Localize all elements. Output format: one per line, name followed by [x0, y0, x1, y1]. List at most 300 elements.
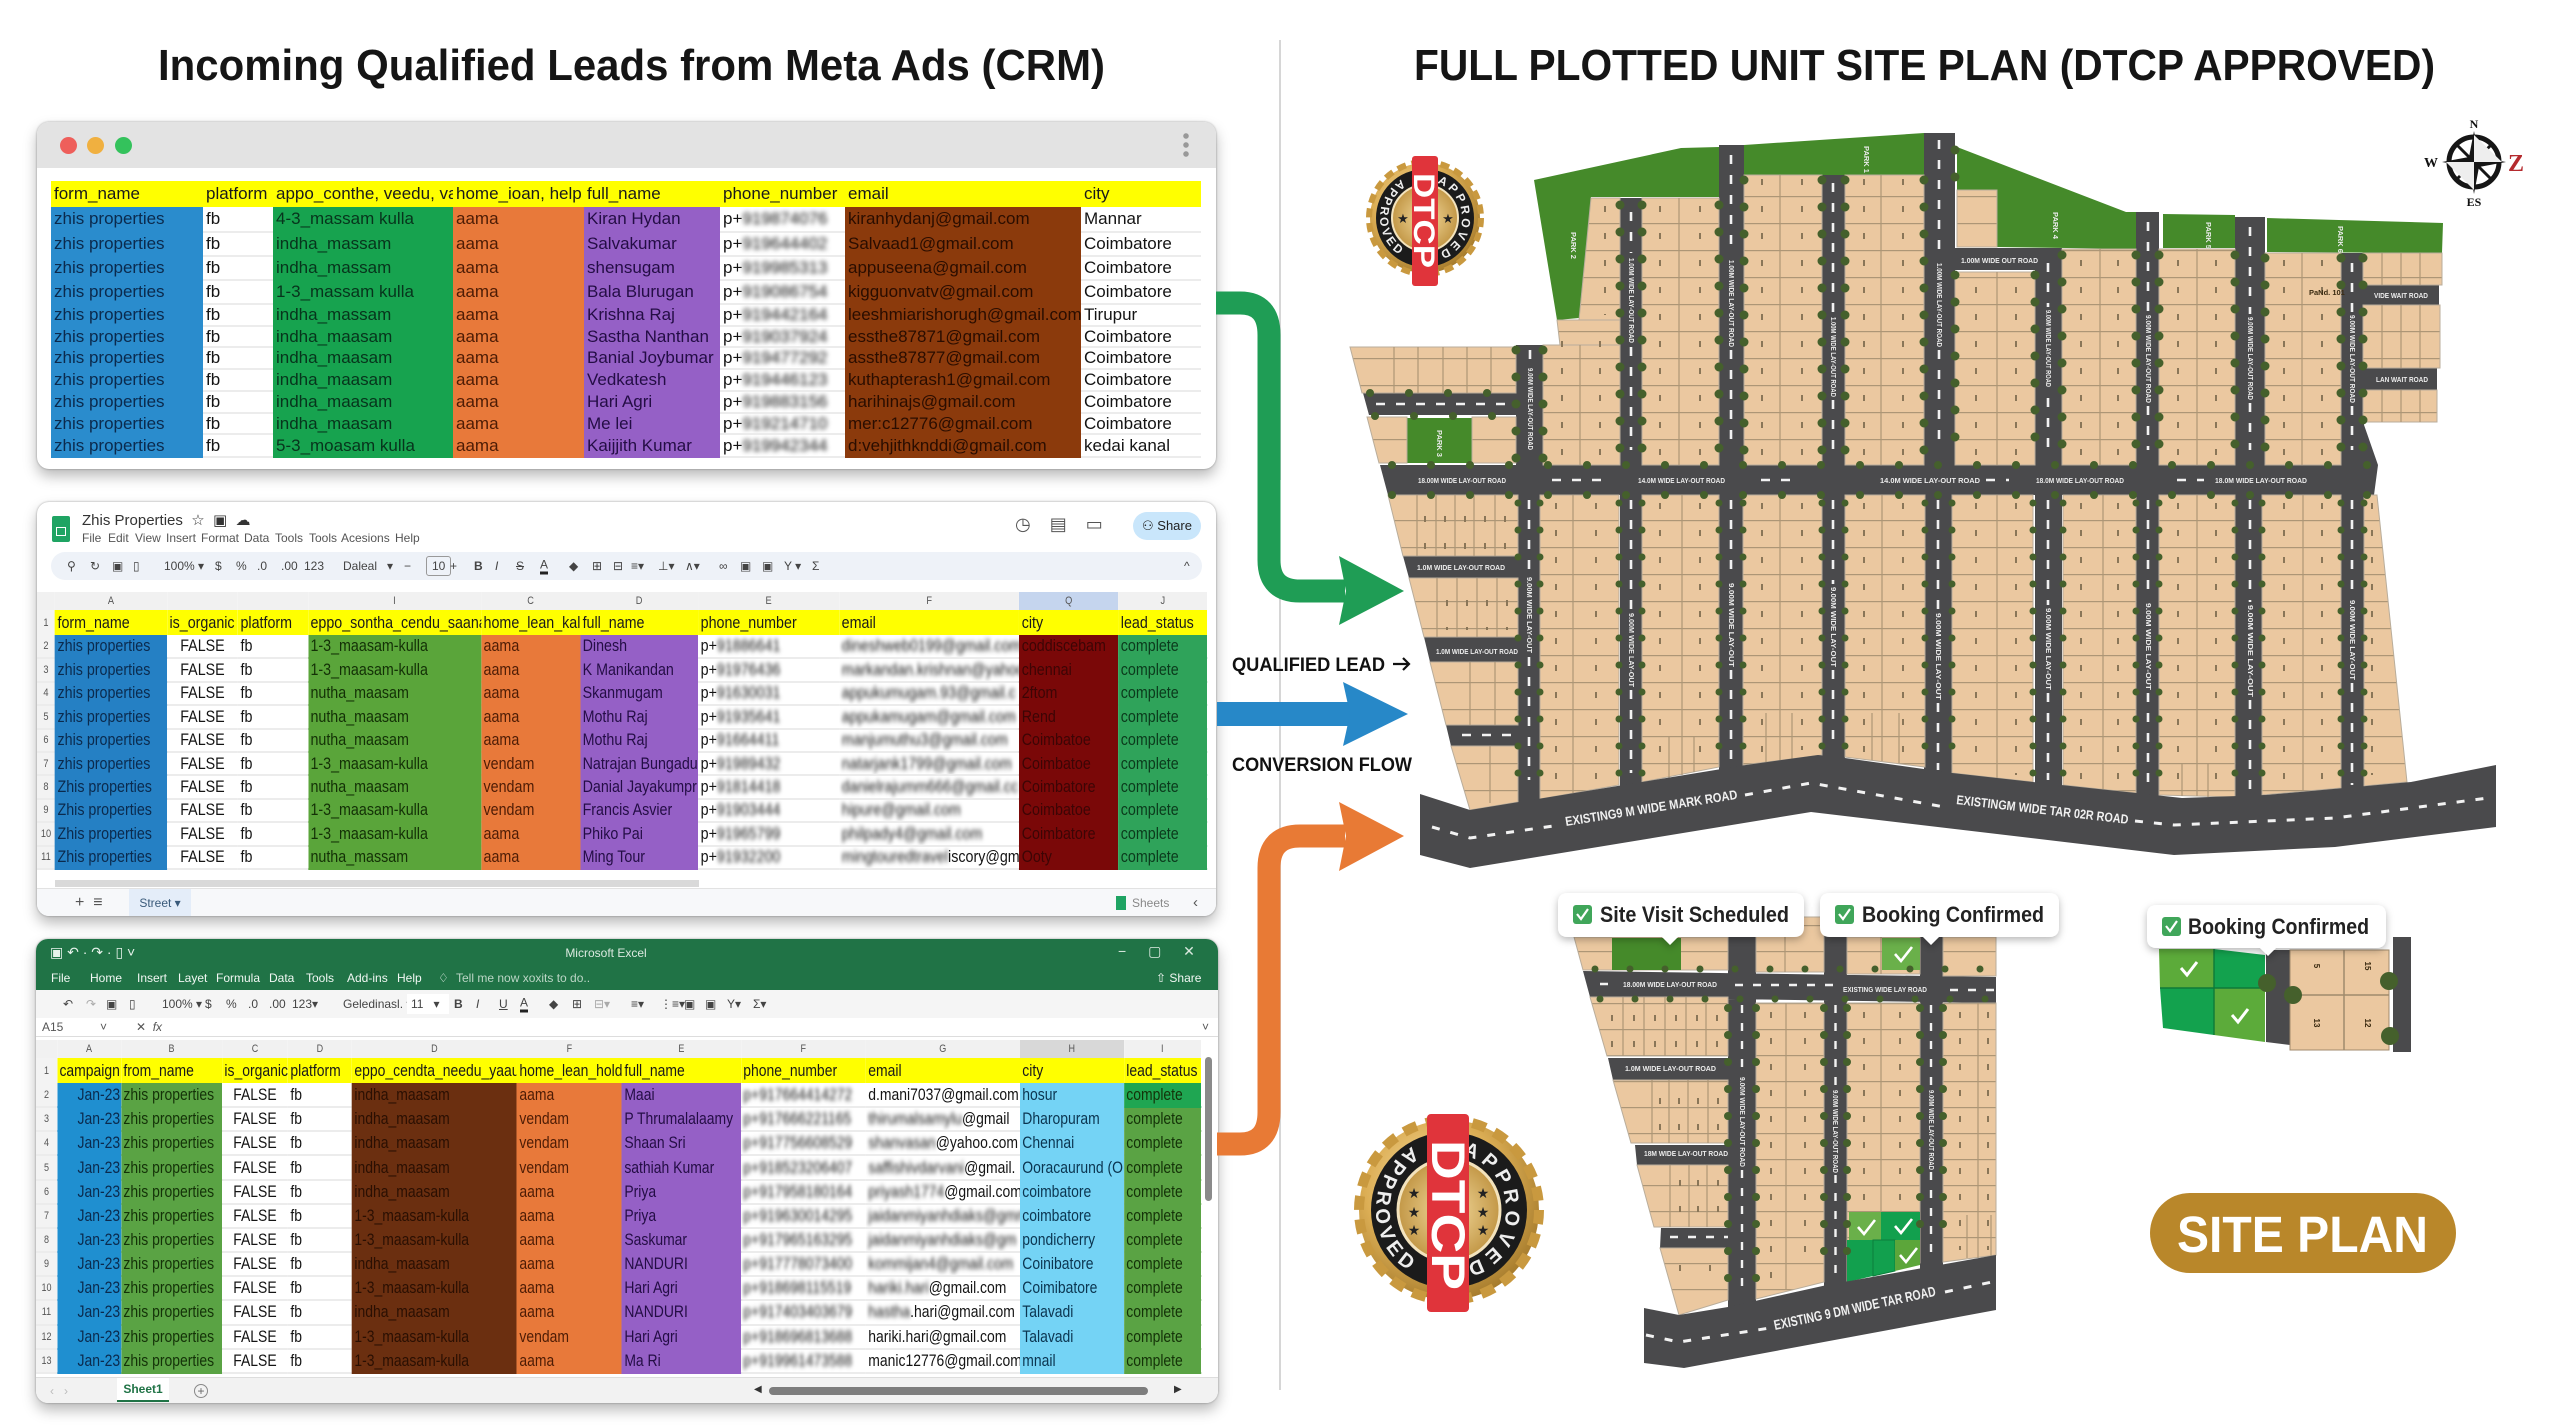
table: CRM leads: 4-3_massam kulla — [276, 209, 414, 228]
table: CRM leads: p+ — [723, 258, 742, 277]
table: Google Sheets leads: K Manikandan — [583, 660, 674, 679]
table: Google Sheets leads: Francis Asvier — [583, 800, 672, 819]
table: CRM leads: Coimbatore — [1084, 234, 1172, 253]
table: Google Sheets leads: FALSE — [180, 707, 225, 726]
table: Excel leads: p+917664414272 — [743, 1085, 852, 1104]
excel title bar — [36, 939, 1218, 990]
excel toolbar: B — [454, 997, 463, 1011]
site plan: booked plot detail — [2159, 937, 2411, 1052]
table: Excel leads: kommijan4@gmail.com — [868, 1254, 1013, 1273]
main road labels: 18.0M WIDE LAY-OUT ROAD — [2036, 476, 2124, 485]
table: CRM leads: Bala Blurugan — [587, 282, 694, 301]
table: Google Sheets leads: Q — [1065, 595, 1072, 607]
table: CRM leads: phone_number — [723, 184, 837, 203]
table: Excel leads: E — [678, 1043, 684, 1055]
table: Google Sheets leads: aama — [484, 824, 519, 843]
table: Excel leads: Jan-23 — [77, 1182, 120, 1201]
sheets toolbar: ⊞ — [592, 559, 602, 573]
excel toolbar: ≡▾ — [631, 997, 644, 1011]
table: Google Sheets leads: zhis properties — [57, 730, 150, 749]
table: Excel leads: FALSE — [233, 1158, 277, 1177]
table: Google Sheets leads: C — [527, 595, 534, 607]
table: Excel leads: p+919961473588 — [743, 1351, 852, 1370]
excel toolbar: ◆ — [549, 997, 558, 1011]
table: Google Sheets leads: 3 — [43, 664, 49, 676]
table: Google Sheets leads: complete — [1121, 847, 1179, 866]
table: Excel leads: indha_maasam — [354, 1158, 450, 1177]
table: Excel leads: @yahoo.com — [936, 1133, 1018, 1152]
table: Excel leads: Ma Ri — [624, 1351, 661, 1370]
main road labels: 1.00M WIDE LAY-OUT ROAD — [1829, 317, 1838, 397]
main road labels: 9.00M WIDE LAY-OUT ROAD — [1526, 368, 1535, 450]
table: Excel leads: FALSE — [233, 1278, 277, 1297]
table: Excel leads: 8 — [44, 1234, 49, 1246]
table: Google Sheets leads: FALSE — [180, 660, 225, 679]
table: Excel leads: hosur — [1022, 1085, 1057, 1104]
table: Excel leads: lead_status — [1126, 1060, 1198, 1080]
table: Excel leads: p+917778073400 — [743, 1254, 852, 1273]
table: Google Sheets leads: danielrajumm666@gmail.cc — [842, 777, 1018, 796]
arrow: orange lead flow — [1217, 802, 1404, 1144]
table: Google Sheets leads: full_name — [583, 612, 645, 632]
arrow: green lead flow — [1216, 303, 1404, 625]
table: CRM leads: p+ — [723, 305, 742, 324]
table: Google Sheets leads: 1-3_maasam-kulla — [310, 660, 428, 679]
table: Excel leads: F — [567, 1043, 572, 1055]
table: Excel leads: Jan-23 — [77, 1327, 120, 1346]
excel toolbar: 123▾ — [292, 997, 318, 1011]
table: Google Sheets leads: fb — [240, 636, 252, 655]
table: Excel leads: B — [168, 1043, 174, 1055]
table: CRM leads: aama — [456, 436, 499, 454]
table: Excel leads: p+919630014295 — [743, 1206, 852, 1225]
trees — [1516, 150, 2363, 462]
table: Excel leads: FALSE — [233, 1327, 277, 1346]
table: Google Sheets leads: Coimbatoe — [1022, 754, 1091, 773]
document title: Zhis Properties ☆ ▣ ☁ — [82, 512, 250, 529]
main road labels: 1.00M WIDE LAY-OUT ROAD — [1727, 260, 1736, 347]
table: Google Sheets leads: 4 — [43, 687, 49, 699]
table: Google Sheets leads: chennai — [1022, 660, 1072, 679]
badge: large DTCP seal — [1354, 1114, 1544, 1312]
table: Google Sheets leads: 11 — [41, 851, 51, 863]
table: Google Sheets leads: F — [926, 595, 932, 607]
table: Excel leads: p+918696813688 — [743, 1327, 852, 1346]
table: CRM leads: Sastha Nanthan — [587, 326, 709, 346]
table: Excel leads: zhis properties — [123, 1158, 214, 1177]
main road labels: 14.0M WIDE LAY-OUT ROAD — [1638, 476, 1725, 485]
badge: small DTCP seal: ★ — [1397, 211, 1409, 226]
table: Google Sheets leads: 91976436 — [717, 660, 780, 679]
table: Excel leads: phone_number — [743, 1060, 837, 1080]
quick access icons: ▣ ↶ · ↷ · ▯ ˅ — [50, 944, 135, 960]
sheet tab bar: Sheet1 — [123, 1382, 163, 1396]
table: CRM leads: kigguonvatv@gmail.com — [848, 282, 1033, 301]
table: Google Sheets leads: complete — [1121, 800, 1179, 819]
table: Google Sheets leads: is_organic — [169, 612, 235, 632]
main road labels: 14.0M WIDE LAY-OUT ROAD — [1880, 476, 1981, 485]
table: Google Sheets leads: 91664411 — [717, 730, 779, 749]
road centre dashes — [1376, 140, 2352, 790]
table: CRM leads — [51, 181, 1201, 458]
table: CRM leads: aama — [456, 326, 499, 346]
table: Google Sheets leads: zhis properties — [57, 636, 150, 655]
excel toolbar: I — [476, 997, 479, 1011]
table: Excel leads: Maai — [624, 1085, 655, 1104]
table: CRM leads: platform — [206, 184, 267, 203]
table: Excel leads: zhis properties — [123, 1278, 214, 1297]
table: Excel leads: D — [431, 1043, 438, 1055]
zoomed road labels: 1.0M WIDE LAY-OUT ROAD — [1625, 1064, 1717, 1073]
vertical scrollbar — [1205, 1057, 1212, 1201]
table: Excel leads: email — [868, 1060, 902, 1080]
sheets toolbar: $ — [215, 559, 222, 573]
existing bottom road: EXISTING9 M WIDE MARK ROAD — [1564, 787, 1738, 829]
excel toolbar: ▯ — [129, 997, 136, 1011]
share button — [1133, 512, 1201, 540]
compass: W — [2424, 156, 2438, 171]
table: Google Sheets leads: D — [636, 595, 642, 607]
table: Google Sheets leads: 5 — [43, 711, 49, 723]
table: CRM leads: fb — [206, 436, 220, 454]
table: Excel leads: Jan-23 — [77, 1133, 120, 1152]
sheets toolbar: .0 — [257, 559, 267, 573]
excel toolbar: ▣ — [106, 997, 117, 1011]
table: CRM leads: Banial Joybumar — [587, 348, 714, 367]
table: Excel leads: Priya — [624, 1206, 656, 1225]
sheets menu: Tools — [309, 531, 337, 545]
table: CRM leads: kuthapterash1@gmail.com — [848, 370, 1050, 389]
table: Google Sheets leads: vendam — [484, 777, 534, 796]
table: CRM leads: indha_maasam — [276, 326, 392, 346]
sheets toolbar: ^ — [1184, 559, 1190, 573]
table: Google Sheets leads: complete — [1121, 754, 1179, 773]
plots — [1350, 175, 2442, 810]
main road labels: PaNd. 101 — [2309, 288, 2345, 297]
table: Excel leads: 13 — [41, 1355, 52, 1367]
table: Excel leads: complete — [1126, 1302, 1183, 1321]
table: Google Sheets leads: 2 — [43, 640, 49, 652]
sheets toolbar: Y ▾ — [784, 559, 801, 573]
table: Excel leads: indha_maasam — [354, 1302, 450, 1321]
table: Excel leads: indha_maasam — [354, 1182, 450, 1201]
table: CRM leads: fb — [206, 305, 220, 324]
table: Google Sheets leads: natarjank1799@gmail.com — [842, 754, 1012, 773]
table: Excel leads: Saskumar — [624, 1230, 687, 1249]
site plan: booked plot detail: 5 — [2312, 964, 2321, 969]
badge: large DTCP seal: DTCP — [1422, 1140, 1475, 1290]
table: CRM leads: zhis properties — [54, 258, 165, 277]
table: CRM leads: 919446123 — [742, 370, 827, 389]
table: Excel leads: NANDURI — [624, 1302, 688, 1321]
table: Excel leads: zhis properties — [123, 1109, 214, 1128]
callout: booking confirmed detail: Booking Confirmed — [2188, 914, 2369, 939]
table: Excel leads: @gmail. — [964, 1158, 1015, 1177]
table: Excel leads: hariki.hari@gmail.com — [868, 1327, 1006, 1346]
table: CRM leads: p+ — [723, 282, 742, 301]
badge: large DTCP seal: APPROVED — [1376, 1146, 1416, 1268]
sheets toolbar: ⊟ — [613, 559, 623, 573]
table: Excel leads: city — [1022, 1060, 1043, 1080]
table: Excel leads: full_name — [624, 1060, 685, 1080]
window buttons: − ▢ ✕ — [1118, 943, 1195, 959]
table: Excel leads: from_name — [123, 1060, 194, 1080]
table: Excel leads: zhis properties — [123, 1206, 214, 1225]
main road labels: 9.00M WIDE LAY-OUT — [1525, 577, 1534, 653]
zoomed road labels: 9.00M WIDE LAY-OUT ROAD — [1738, 1077, 1747, 1168]
sheets toolbar: A — [540, 558, 548, 572]
table: Google Sheets leads: FALSE — [180, 683, 225, 702]
table: Google Sheets leads: appukumugam.93@gmail.c — [842, 683, 1016, 702]
table: Google Sheets leads: Dinesh — [583, 636, 627, 655]
table: Excel leads: 1-3_maasam-kulla — [354, 1206, 469, 1225]
table: Excel leads: p+918698115519 — [743, 1278, 851, 1297]
sheets toolbar: I — [495, 559, 498, 573]
table: Excel leads: jaidanmiyanhdiaks@gm — [868, 1230, 1016, 1249]
table: Google Sheets leads: p+ — [701, 847, 717, 866]
header icons: ◷ ▤ ▭ — [1015, 514, 1103, 534]
table: Google Sheets leads: coddiscebam — [1022, 636, 1106, 655]
table: CRM leads: fb — [206, 370, 220, 389]
panel: Google Sheets window — [37, 502, 1216, 916]
excel toolbar: ⊞ — [572, 997, 582, 1011]
sheet tab bar: Sheets — [1132, 896, 1169, 910]
table: Excel leads: fb — [290, 1230, 302, 1249]
table: Excel leads: fb — [290, 1158, 302, 1177]
table: Google Sheets leads: complete — [1121, 660, 1179, 679]
table: Google Sheets leads: aama — [484, 636, 519, 655]
table: CRM leads: fb — [206, 282, 220, 301]
excel toolbar: ⋮≡▾ — [660, 997, 685, 1011]
callout: site visit scheduled: Site Visit Scheduled — [1600, 902, 1789, 927]
title: CRM leads: Incoming Qualified Leads from Meta Ads (CRM) — [158, 41, 1105, 90]
table: Excel leads: zhis properties — [123, 1230, 214, 1249]
table: Google Sheets leads: 91886641 — [717, 636, 780, 655]
table: Excel leads: Jan-23 — [77, 1254, 120, 1273]
table: Google Sheets leads: lead_status — [1121, 612, 1194, 632]
table: Excel leads: complete — [1126, 1351, 1183, 1370]
table: Google Sheets leads: phone_number — [701, 612, 797, 632]
table: Google Sheets leads: FALSE — [180, 777, 225, 796]
table: Excel leads: campaign — [59, 1060, 120, 1080]
main road labels: 9.00M WIDE LAY-OUT — [2246, 605, 2255, 697]
title: site plan: FULL PLOTTED UNIT SITE PLAN (DTCP APPROVED) — [1414, 41, 2435, 90]
main road labels: PARK 5 — [2204, 222, 2213, 249]
table: Excel leads: home_lean_hold — [519, 1060, 622, 1080]
table: Google Sheets leads: email — [842, 612, 876, 632]
table: Excel leads: p+917756608529 — [743, 1133, 852, 1152]
table: CRM leads: Kaijjith Kumar — [587, 436, 692, 454]
table: CRM leads: Vedkatesh — [587, 370, 666, 389]
excel toolbar: 100% ▾ — [162, 997, 202, 1011]
table: Excel leads: saffishivdarvani — [868, 1158, 964, 1177]
sheets toolbar: − — [404, 559, 411, 573]
table: Excel leads: thirumalsamylu — [868, 1109, 962, 1128]
table: Google Sheets leads: Mothu Raj — [583, 707, 648, 726]
table: CRM leads: zhis properties — [54, 305, 165, 324]
table: Excel leads — [36, 1040, 1202, 1374]
table: Google Sheets leads: platform — [240, 612, 292, 632]
sheet tab bar — [36, 1377, 1218, 1404]
table: Excel leads: complete — [1126, 1182, 1183, 1201]
table: Google Sheets leads: manjumuthu3@gmail.com — [842, 730, 1008, 749]
table: Excel leads: fb — [290, 1327, 302, 1346]
table: Excel leads: @gmail — [962, 1109, 1009, 1128]
share button: ⚇ Share — [1142, 518, 1192, 533]
table: Google Sheets leads: nutha_maasam — [310, 683, 409, 702]
table: CRM leads: fb — [206, 392, 220, 411]
callout: site visit scheduled — [1558, 893, 1804, 945]
zoomed roads — [1583, 925, 1996, 1310]
table: CRM leads: aama — [456, 258, 499, 277]
site plan: booked plot detail: 12 — [2363, 1019, 2372, 1028]
table: Google Sheets leads: 6 — [43, 734, 49, 746]
sheets toolbar: ▣ — [740, 559, 751, 573]
table: CRM leads: Hari Agri — [587, 392, 652, 411]
table: Google Sheets leads: zhis properties — [57, 754, 150, 773]
excel toolbar: % — [226, 997, 237, 1011]
table: CRM leads: fb — [206, 348, 220, 367]
excel toolbar — [36, 990, 1218, 1018]
table: CRM leads: fb — [206, 326, 220, 346]
sheets menu: File — [82, 531, 101, 545]
table: Google Sheets leads: complete — [1121, 683, 1179, 702]
compass: ES — [2467, 195, 2482, 209]
table: Excel leads: p+917403403679 — [743, 1302, 852, 1321]
table: CRM leads: fb — [206, 414, 220, 432]
table: Excel leads: is_organic — [224, 1060, 288, 1080]
table: Google Sheets leads: p+ — [701, 824, 717, 843]
sheet tab bar: + — [197, 1384, 204, 1398]
table: Excel leads: fb — [290, 1133, 302, 1152]
table: Excel leads: F — [801, 1043, 806, 1055]
table: Excel leads: vendam — [519, 1327, 569, 1346]
callout: booking confirmed — [1820, 893, 2059, 945]
table: Google Sheets leads: city — [1022, 612, 1043, 632]
table: Google Sheets leads: vendam — [484, 800, 534, 819]
sheet tab bar — [37, 888, 1216, 917]
formula bar: ˅ — [1202, 1020, 1209, 1034]
badge: large DTCP seal: ★ — [1408, 1185, 1420, 1201]
table: Google Sheets leads: aama — [484, 660, 519, 679]
table: Excel leads: aama — [519, 1351, 554, 1370]
table: Google Sheets leads: 8 — [43, 781, 49, 793]
table: CRM leads: Coimbatore — [1084, 326, 1172, 346]
table: Excel leads: Shaan Sri — [624, 1133, 686, 1152]
table: Google Sheets leads: aama — [484, 847, 519, 866]
main road labels: 9.00M WIDE LAY-OUT — [2144, 603, 2153, 690]
table: Excel leads: H — [1069, 1043, 1075, 1055]
excel toolbar: ↷ — [86, 997, 96, 1011]
table: CRM leads: aama — [456, 370, 499, 389]
table: CRM leads: p+ — [723, 436, 742, 454]
table: Excel leads: indha_maasam — [354, 1085, 450, 1104]
table: Excel leads: aama — [519, 1230, 554, 1249]
window controls — [60, 137, 132, 154]
table: Google Sheets leads: nutha_maasam — [310, 707, 409, 726]
table: CRM leads: p+ — [723, 370, 742, 389]
main road labels: 9.00M WIDE LAY-OUT — [1934, 613, 1943, 700]
excel menu: Data — [269, 971, 294, 985]
table: Excel leads: coimbatore — [1022, 1206, 1091, 1225]
table: Excel leads: @gmail.com — [944, 1182, 1020, 1201]
table: Excel leads: FALSE — [233, 1085, 277, 1104]
zoomed park — [1612, 938, 1681, 970]
table: CRM leads: home_ioan, help — [456, 184, 582, 203]
sheet tab bar: ▶ — [1174, 1384, 1182, 1395]
existing tar road — [1644, 1255, 1996, 1368]
table: Google Sheets leads: dineshweb0199@gmail.com — [842, 636, 1019, 655]
table: Excel leads: NANDURI — [624, 1254, 688, 1273]
table: CRM leads: Coimbatore — [1084, 392, 1172, 411]
table: Excel leads: aama — [519, 1254, 554, 1273]
table: Google Sheets leads: fb — [240, 777, 252, 796]
excel toolbar: .00 — [269, 997, 286, 1011]
table: Excel leads: I — [1161, 1043, 1164, 1055]
table: Excel leads: Ooracaurund (O — [1022, 1158, 1123, 1177]
table: Google Sheets leads: I — [393, 595, 396, 607]
table: Excel leads: d.mani7037@gmail.com — [868, 1085, 1019, 1104]
table: CRM leads: Krishna Raj — [587, 305, 675, 324]
table: Google Sheets leads — [37, 592, 1208, 870]
badge: large DTCP seal: ★ — [1408, 1222, 1420, 1238]
table: Google Sheets leads: fb — [240, 824, 252, 843]
table: CRM leads: p+ — [723, 234, 742, 253]
zoomed road labels: 9.00M WIDE LAY-OUT ROAD — [1831, 1090, 1840, 1173]
zoomed road labels: 18.00M WIDE LAY-OUT ROAD — [1623, 980, 1718, 989]
formula bar — [36, 1018, 1218, 1037]
table: Google Sheets leads: FALSE — [180, 754, 225, 773]
table: Excel leads: Talavadi — [1022, 1327, 1073, 1346]
excel toolbar: Σ▾ — [753, 997, 766, 1011]
table: Excel leads: 1-3_maasam-kulla — [354, 1278, 469, 1297]
zoomed road dashes and trees — [1600, 984, 1996, 1295]
table: Excel leads: zhis properties — [123, 1133, 214, 1152]
sheets toolbar: + — [450, 559, 457, 573]
table: CRM leads: Mannar — [1084, 209, 1142, 228]
main road labels: PARK 2 — [1569, 232, 1578, 259]
main road labels — [1417, 146, 2428, 700]
table: CRM leads: zhis properties — [54, 326, 165, 346]
badge: large DTCP seal: ★ — [1477, 1185, 1489, 1201]
table: CRM leads: d:vehjithknddi@gmail.com — [848, 436, 1047, 454]
table: Excel leads: aama — [519, 1278, 554, 1297]
table: Excel leads: FALSE — [233, 1133, 277, 1152]
table: Excel leads: shanvasan — [868, 1133, 936, 1152]
sheets menu: Edit — [108, 531, 129, 545]
sheets menu: View — [135, 531, 161, 545]
table: Excel leads: Dharopuram — [1022, 1109, 1100, 1128]
table: Google Sheets leads: A — [108, 595, 114, 607]
table: CRM leads: 5-3_moasam kulla — [276, 436, 415, 454]
table: CRM leads: aama — [456, 209, 499, 228]
formula bar: A15 ˅ — [42, 1020, 107, 1034]
table: Excel leads: indha_maasam — [354, 1109, 450, 1128]
table: Excel leads: aama — [519, 1182, 554, 1201]
plot number ticks — [1425, 179, 2372, 790]
sheets menu: Data — [244, 531, 269, 545]
callout: booking confirmed detail — [2147, 905, 2386, 956]
table: Google Sheets leads: fb — [240, 683, 252, 702]
table: Excel leads: 1-3_maasam-kulla — [354, 1351, 469, 1370]
table: CRM leads: Salvaad1@gmail.com — [848, 234, 1014, 253]
table: Google Sheets leads: 7 — [43, 758, 49, 770]
table: Excel leads: fb — [290, 1109, 302, 1128]
table: Google Sheets leads: 1-3_maasam-kulla — [310, 636, 428, 655]
table: Google Sheets leads: zhis properties — [57, 683, 150, 702]
excel menu: Add-ins — [347, 971, 388, 985]
table: Excel leads: Chennai — [1022, 1133, 1074, 1152]
